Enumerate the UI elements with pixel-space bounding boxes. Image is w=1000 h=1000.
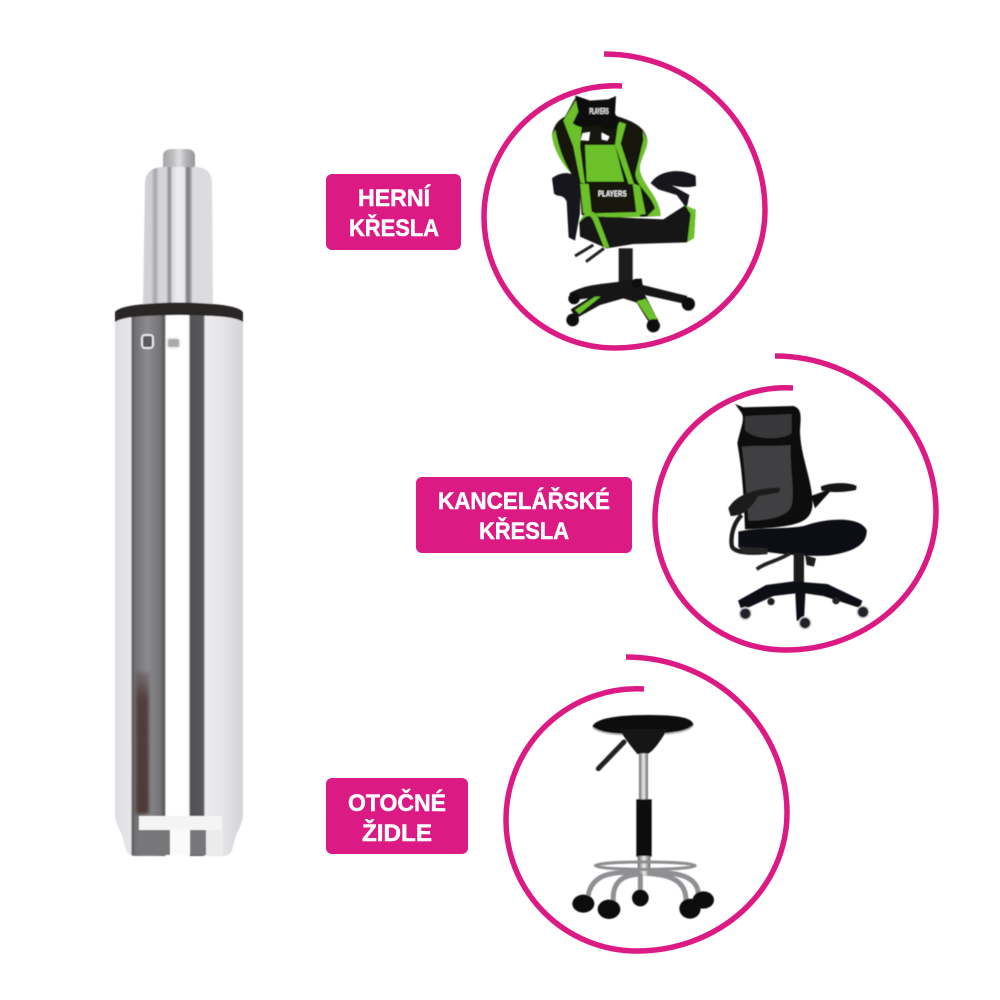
lumbar logo text: PLAYERS: [598, 190, 627, 199]
casters: [739, 608, 751, 620]
gas piston cylinder: [115, 149, 243, 856]
seat cone: [619, 729, 667, 754]
right armrest: [651, 171, 696, 208]
piston pin: [163, 149, 195, 167]
seat green trim: [579, 205, 696, 247]
wide left green strip: [563, 100, 585, 184]
seat pan: [738, 547, 767, 553]
label: kancelářské křesla: KŘESLA: [479, 517, 569, 545]
base: [569, 278, 687, 324]
casters: [572, 895, 594, 913]
mesh back: [742, 445, 793, 521]
chair back: [735, 404, 812, 529]
seat rim: [593, 726, 693, 735]
stem: [619, 248, 633, 287]
levers: [575, 245, 604, 262]
icon: gaming chair: [552, 95, 696, 332]
seat: [738, 520, 867, 556]
mesh headrest: [745, 414, 792, 438]
label: otočné židle: ŽIDLE: [362, 819, 432, 847]
ring: swivel stool: [506, 657, 787, 951]
label: herní křesla: [326, 174, 461, 250]
piston dark reflection: [136, 672, 149, 814]
ring: office chair: [655, 356, 936, 650]
outer left green strip: [552, 129, 571, 173]
lever: [598, 742, 624, 769]
headrest logo text: PLAYERS: [589, 107, 609, 116]
headrest strap gaps: [581, 132, 609, 141]
piston bottom stripes: [139, 830, 222, 855]
foot ring: [595, 862, 695, 869]
right green wedge: [615, 122, 634, 184]
upper chrome post: [639, 753, 648, 800]
piston notches: [142, 335, 153, 348]
lumbar green strips: [580, 183, 646, 215]
chrome legs: [588, 872, 698, 902]
piston upper tube: [143, 167, 213, 304]
piston black collar: [115, 302, 243, 322]
right armrest: [821, 483, 857, 492]
stem: [794, 553, 804, 587]
chair back: [552, 98, 661, 218]
lower chrome: [638, 856, 650, 876]
lever: [757, 553, 790, 569]
seat: [593, 715, 693, 735]
label: kancelářské křesla: [416, 477, 632, 553]
black column: [636, 799, 652, 857]
left armrest: [552, 173, 581, 241]
label: otočné židle: [326, 778, 468, 854]
back green panel: [585, 145, 624, 182]
label: herní křesla: KŘESLA: [349, 214, 439, 242]
label: herní křesla: HERNÍ: [358, 184, 431, 212]
base: [738, 581, 862, 621]
casters: [568, 293, 580, 304]
outer right green strip: [635, 131, 661, 216]
icon: office chair: [728, 404, 869, 629]
label: kancelářské křesla: KANCELÁŘSKÉ: [438, 487, 610, 515]
piston white band: [139, 816, 222, 830]
base green: [575, 297, 657, 322]
label: otočné židle: OTOČNÉ: [348, 789, 446, 817]
left armrest: [728, 488, 780, 516]
ring: gaming chair: [484, 54, 765, 348]
headrest: [573, 95, 619, 130]
icon: swivel stool: [572, 715, 714, 919]
piston main body: [115, 312, 243, 856]
seat: [579, 205, 696, 248]
